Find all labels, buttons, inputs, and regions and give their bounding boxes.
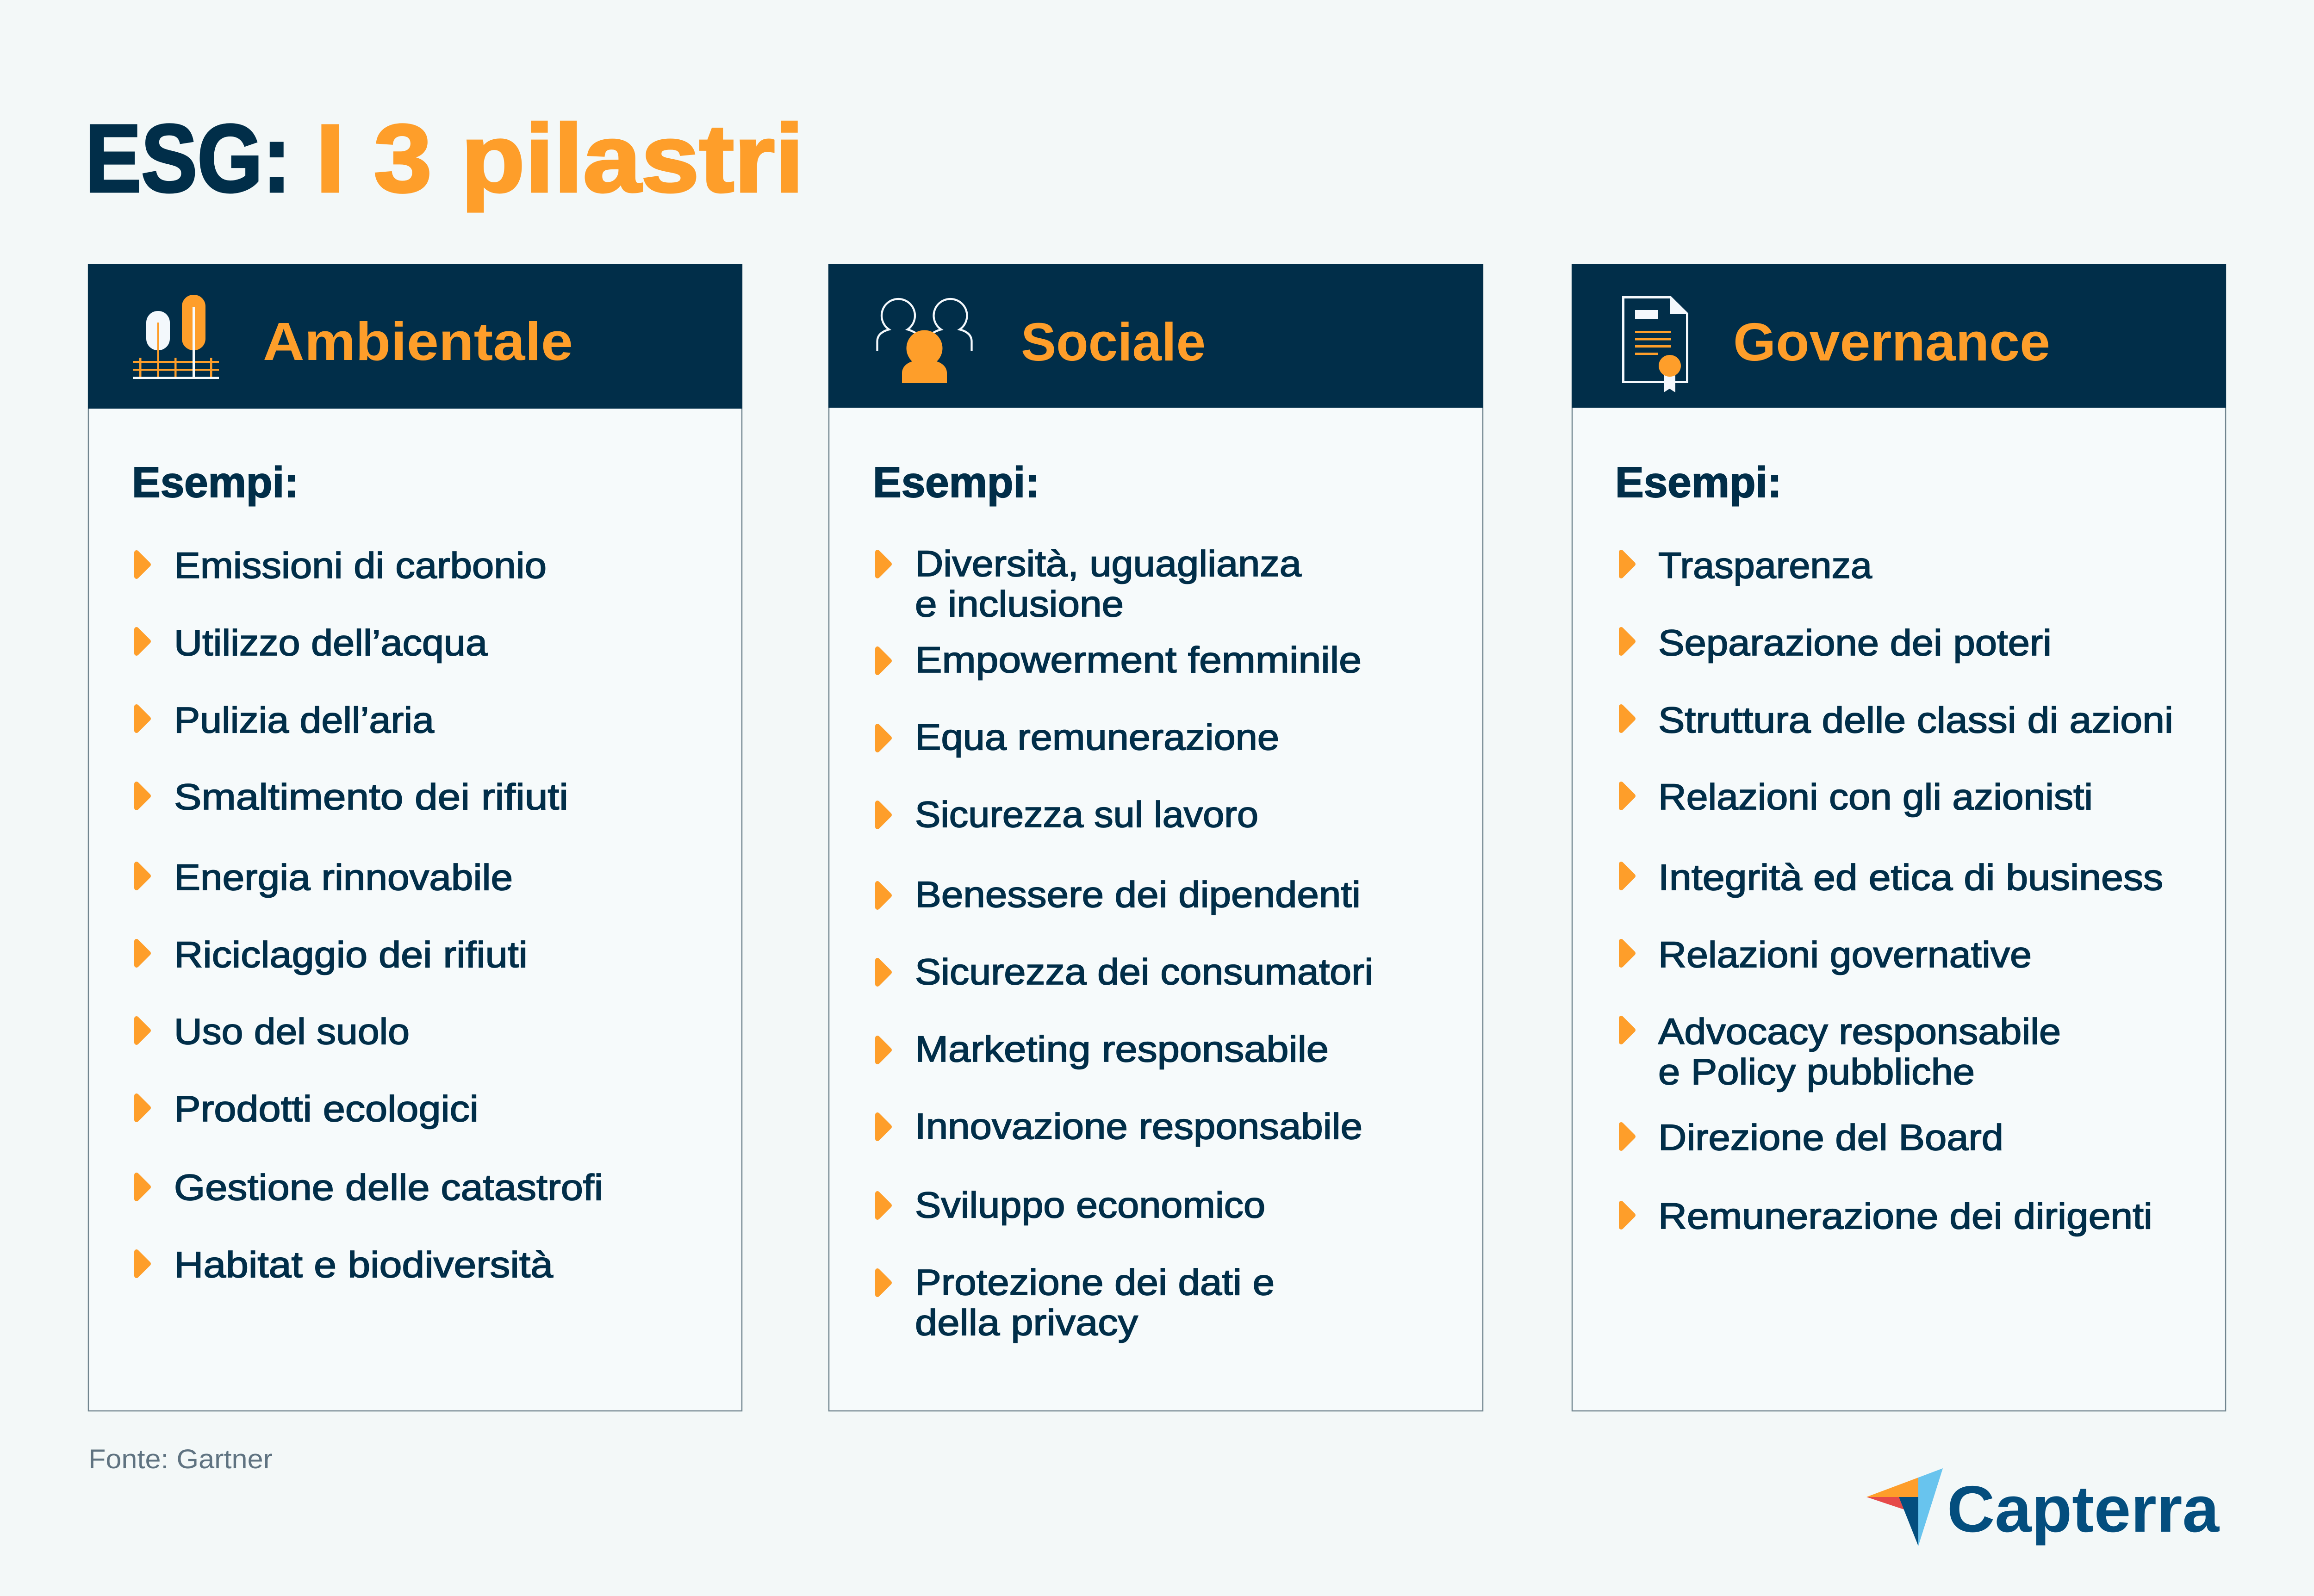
item: Sicurezza sul lavoro: Sicurezza sul lavoro [915, 794, 1258, 835]
item: Diversità, uguaglianza e inclusione [877, 543, 1301, 624]
item: Direzione del Board: Direzione del Board [1658, 1117, 2003, 1158]
item: Advocacy responsabile e Policy pubbliche [1621, 1011, 2061, 1092]
item: Habitat e biodiversità: Habitat e biodiversità [174, 1244, 553, 1285]
item: Marketing responsabile: Marketing responsabile [915, 1028, 1329, 1069]
item: Advocacy responsabile e Policy pubbliche: Advocacy responsabile [1658, 1011, 2061, 1052]
item: Separazione dei poteri: Separazione dei poteri [1658, 622, 2052, 663]
icon: people [877, 299, 972, 383]
item: Equa remunerazione: Equa remunerazione [915, 716, 1279, 758]
title: ESG: [85, 105, 291, 212]
item: Emissioni di carbonio: Emissioni di carbonio [174, 545, 547, 586]
item: Smaltimento dei rifiuti: Smaltimento dei rifiuti [174, 776, 568, 817]
subheading: Esempi: Esempi: [132, 458, 299, 506]
subheading: Esempi: Esempi: [873, 458, 1039, 506]
item: Diversità, uguaglianza e inclusione: Diversità, uguaglianza [915, 543, 1301, 584]
item: Relazioni governative: Relazioni governative [1658, 934, 2032, 975]
icon: certificate document [1624, 297, 1687, 392]
subheading: Esempi: Esempi: [1615, 458, 1782, 506]
item: Empowerment femminile: Empowerment femminile [915, 639, 1362, 680]
item: Utilizzo dell'acqua: Utilizzo dell’acqua [174, 622, 487, 663]
item: Advocacy responsabile e Policy pubbliche: e Policy pubbliche [1658, 1051, 1975, 1092]
item: Pulizia dell'aria: Pulizia dell’aria [174, 699, 434, 740]
item: Protezione dei dati e della privacy [877, 1261, 1275, 1343]
title [85, 105, 804, 212]
item: Trasparenza: Trasparenza [1658, 545, 1872, 586]
item: Innovazione responsabile: Innovazione responsabile [915, 1105, 1362, 1147]
item: Remunerazione dei dirigenti: Remunerazione dei dirigenti [1658, 1195, 2152, 1236]
heading: Governance: Governance [1733, 312, 2050, 372]
item: Protezione dei dati e della privacy: della privacy [915, 1302, 1138, 1343]
logo: Capterra: Capterra [1947, 1472, 2220, 1546]
item: Integrità ed etica di business: Integrità ed etica di business [1658, 857, 2163, 898]
source note: Fonte: Gartner [88, 1444, 273, 1474]
heading: Sociale: Sociale [1021, 312, 1206, 372]
item: Gestione delle catastrofi: Gestione delle catastrofi [174, 1167, 603, 1208]
item: Struttura delle classi di azioni: Struttura delle classi di azioni [1658, 699, 2173, 740]
panel: Sociale [828, 264, 1483, 1411]
item: Riciclaggio dei rifiuti: Riciclaggio dei rifiuti [174, 934, 528, 975]
heading: Ambientale: Ambientale [263, 311, 573, 372]
item: Protezione dei dati e della privacy: Protezione dei dati e [915, 1261, 1275, 1303]
item: Prodotti ecologici: Prodotti ecologici [174, 1088, 479, 1129]
panel: Ambientale [88, 264, 742, 1411]
item: Sicurezza dei consumatori: Sicurezza dei consumatori [915, 951, 1373, 992]
item: Uso del suolo: Uso del suolo [174, 1011, 410, 1052]
item: Energia rinnovabile: Energia rinnovabile [174, 857, 513, 898]
item: Sviluppo economico: Sviluppo economico [915, 1184, 1265, 1225]
icon: trees and fence [133, 295, 219, 379]
item: Relazioni con gli azionisti: Relazioni con gli azionisti [1658, 776, 2093, 817]
panel: Governance [1572, 264, 2226, 1411]
title: I 3 pilastri [316, 105, 804, 212]
item: Benessere dei dipendenti: Benessere dei dipendenti [915, 874, 1361, 915]
item: Diversità, uguaglianza e inclusione: e inclusione [915, 583, 1124, 624]
